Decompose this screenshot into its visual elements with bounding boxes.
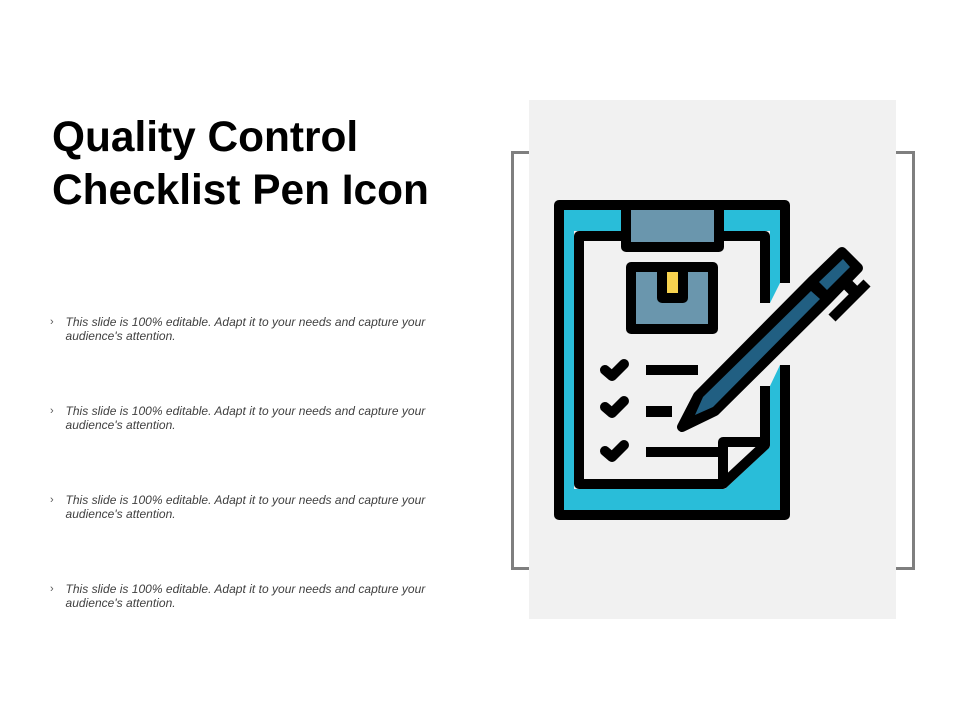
bullet text 4: audience's attention. [66,596,176,610]
bullet text 3: audience's attention. [66,507,176,521]
bullet text 4: This slide is 100% editable. Adapt it to your needs and capture your [66,582,425,596]
bullet text 3: › [50,494,54,506]
title [52,113,429,212]
pen [682,252,867,427]
icon: clipboard with pen [559,205,867,515]
bullet text 1: › [50,316,54,328]
clipboard board [559,205,791,515]
check marks [605,364,624,457]
grey panel [529,100,896,619]
clip [626,205,719,247]
right bracket [896,152,914,568]
bullet text 2: audience's attention. [66,418,176,432]
checklist lines [646,365,720,457]
title: Checklist Pen Icon [52,166,429,212]
bullet text 2 [50,404,426,432]
bullet text 4 [50,582,426,610]
bullet text 1 [50,315,426,343]
bullet text 3 [50,493,426,521]
box icon [631,267,713,329]
bullet text 3: This slide is 100% editable. Adapt it to your needs and capture your [66,493,425,507]
bullet text 4: › [50,583,54,595]
bullet text 1: audience's attention. [66,329,176,343]
bullet text 1: This slide is 100% editable. Adapt it to your needs and capture your [66,315,425,329]
paper sheet [574,231,770,489]
title: Quality Control [52,113,358,160]
bullet text 2: This slide is 100% editable. Adapt it to your needs and capture your [66,404,425,418]
bullet text 2: › [50,405,54,417]
left bracket [512,152,529,568]
